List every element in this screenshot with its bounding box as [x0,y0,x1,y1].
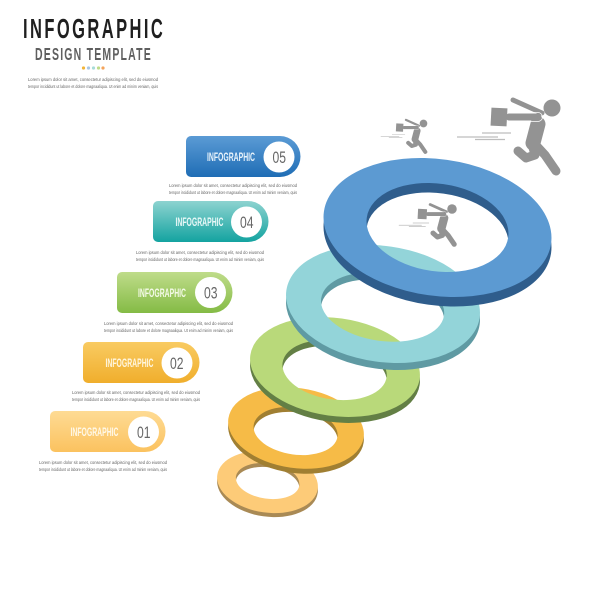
header description text [28,77,158,90]
label 01: INFOGRAPHIC [70,427,118,439]
text block 03: tempor incididunt ut labore et dolore magnaaliqua. Ut enim ad minim veniam, quis [104,328,233,334]
ring 04: teal [278,233,488,382]
label 05: INFOGRAPHIC [207,152,255,164]
text block 04 [136,250,264,263]
label 03: 03 [204,284,218,302]
label 04: INFOGRAPHIC [176,217,224,229]
label 02: INFOGRAPHIC [106,358,154,370]
label 05: 05 [272,148,286,167]
icon: running businessman inside blue ring [399,204,457,244]
ring 03: green [244,307,426,433]
label 02: 02 [170,354,184,373]
text block 05: tempor incididunt ut labore et dolore magnaaliqua. Ut enim ad minim veniam, quis [169,190,297,196]
ring 05: blue [314,144,561,321]
ring 02: orange [223,379,369,482]
label 05 [186,136,300,177]
label 04: 04 [240,213,254,232]
text block 05: Lorem ipsum dolor sit amet, consectetur adipiscing elit, sed do eiusmod [169,183,297,189]
text block 02: tempor incididunt ut labore et dolore magnaaliqua. Ut enim ad minim veniam, quis [72,397,200,403]
text block 01: tempor incididunt ut labore et dolore magnaaliqua. Ut enim ad minim veniam, quis [39,467,167,473]
text block 05 [169,183,297,196]
text block 03: Lorem ipsum dolor sit amet, consectetur adipiscing elit, sed do eiusmod [104,321,233,327]
text block 02: Lorem ipsum dolor sit amet, consectetur adipiscing elit, sed do eiusmod [72,390,200,396]
title: INFOGRAPHIC [23,13,163,44]
label 03: INFOGRAPHIC [138,288,186,300]
header description text: tempor incididunt ut labore et dolore magnaaliqua. Ut enim ad minim veniam, quis [28,84,158,90]
text block 01 [39,460,167,473]
text block 04: tempor incididunt ut labore et dolore magnaaliqua. Ut enim ad minim veniam, quis [136,257,264,263]
decorative colour dots [82,66,105,70]
label 04 [153,201,268,242]
text block 03 [104,321,233,334]
header description text: Lorem ipsum dolor sit amet, consectetur adipiscing elit, sed do eiusmod [28,77,158,83]
label 01 [50,411,166,452]
ring 01: light yellow [213,445,322,523]
subtitle: DESIGN TEMPLATE [35,45,151,65]
label 03 [117,272,232,313]
icon: small running businessman [381,120,427,152]
label 01: 01 [137,423,150,442]
text block 01: Lorem ipsum dolor sit amet, consectetur adipiscing elit, sed do eiusmod [39,460,167,466]
text block 04: Lorem ipsum dolor sit amet, consectetur adipiscing elit, sed do eiusmod [136,250,264,256]
text block 02 [72,390,200,403]
label 02 [83,342,199,383]
icon: large running businessman [457,100,560,171]
